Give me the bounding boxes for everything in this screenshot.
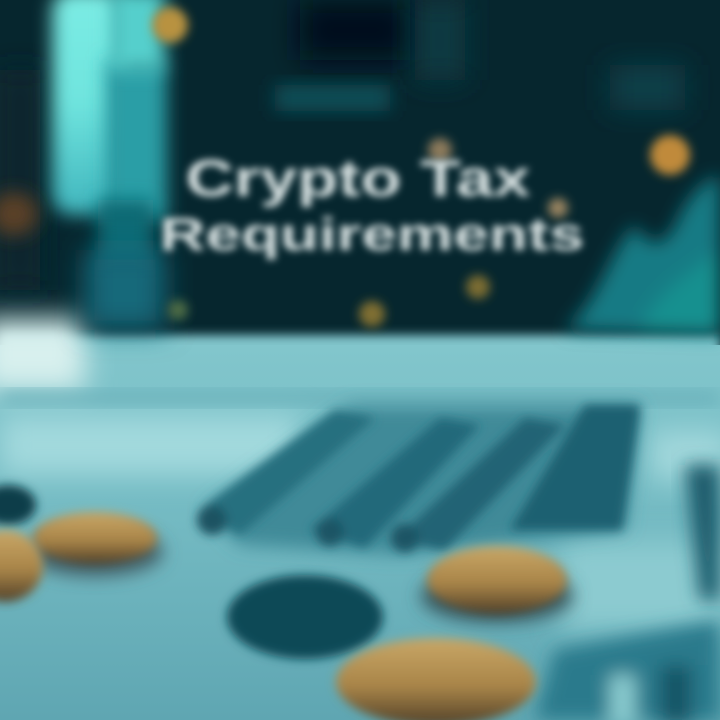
right dark column <box>685 465 720 600</box>
title: Crypto Tax <box>186 150 531 208</box>
left glowing pillar <box>52 0 167 330</box>
background: dark upper scene <box>0 0 720 345</box>
diagonal keyboard-like bars <box>197 405 640 555</box>
title: Requirements <box>160 208 584 260</box>
lower right dark bars <box>535 620 720 720</box>
icon: bronze orb left <box>0 192 38 236</box>
coin: gold left <box>27 512 163 576</box>
coin: gold far left <box>0 530 43 602</box>
title <box>160 150 584 260</box>
coin: dark teal centre <box>227 575 383 659</box>
coin: large gold bottom <box>336 638 536 720</box>
right teal wave <box>565 175 720 335</box>
icon: gold orb top left <box>152 7 188 43</box>
icon: small gold marks under title <box>168 138 568 327</box>
icon: gold orb right <box>650 135 690 175</box>
coin: dark left edge <box>0 485 36 525</box>
background: pale lower scene <box>0 318 720 720</box>
coin: gold right <box>421 546 573 622</box>
